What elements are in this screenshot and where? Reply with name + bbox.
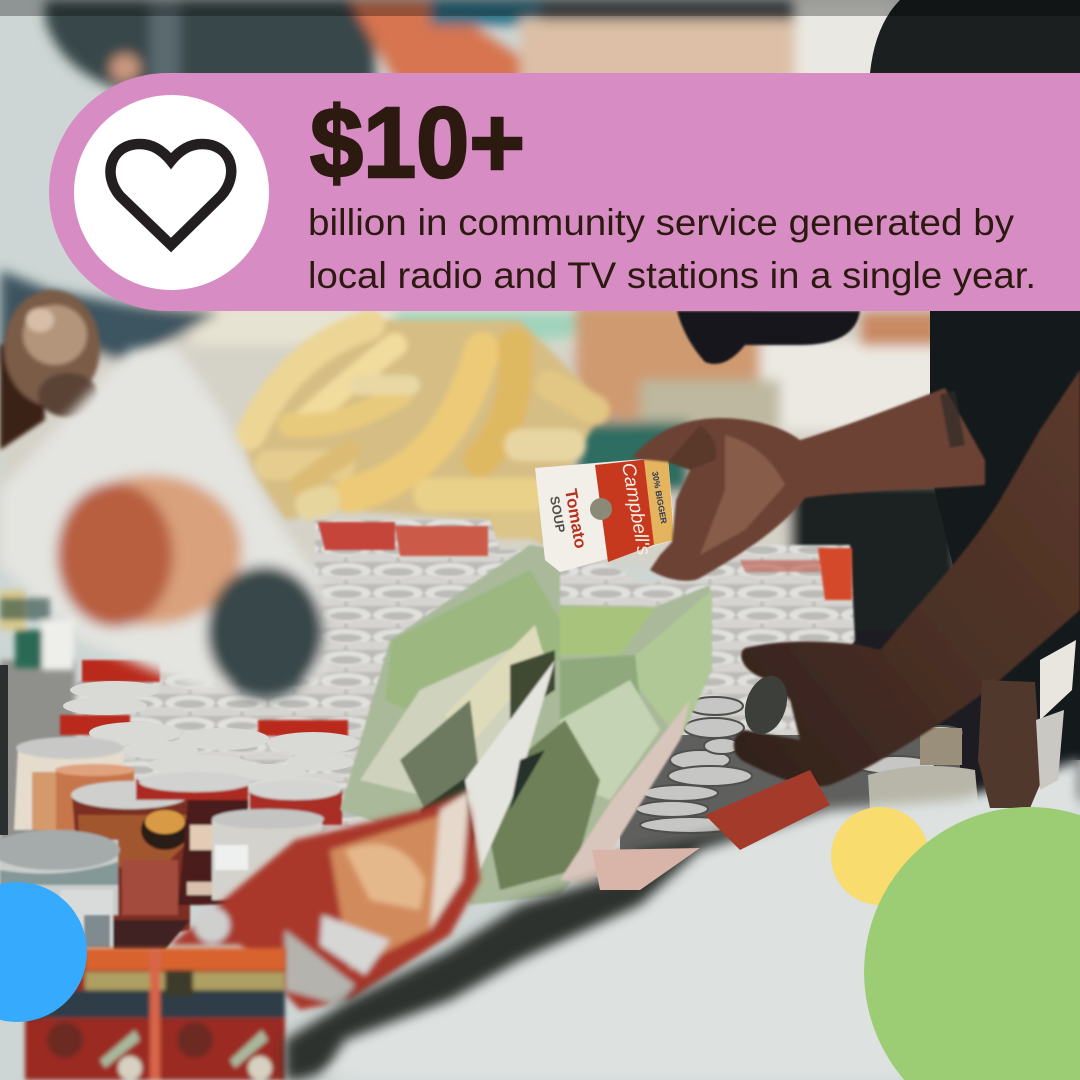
photo: orange snack bag	[170, 790, 480, 1010]
photo: lower forearm and hand	[734, 370, 1080, 786]
description text: local radio and TV stations in a single year.	[308, 255, 1036, 296]
photo: bunch of bananas	[240, 320, 605, 545]
photo: small orange can	[32, 772, 60, 830]
stat banner	[49, 73, 1080, 311]
description text	[308, 202, 1036, 296]
photo: green wrapped newspaper bag	[340, 545, 712, 905]
photo: front-left canned goods	[0, 737, 342, 950]
photo: dark shadow under snack bag	[285, 820, 800, 1080]
description text: billion in community service generated by	[308, 202, 1015, 243]
photo: dark maroon can	[178, 800, 248, 905]
photo: red can bands	[60, 522, 852, 736]
decorative circle: blue	[0, 882, 87, 1022]
photo: upper arm and hand holding the can	[632, 388, 985, 581]
decorative circle: yellow	[831, 807, 929, 905]
photo: red label can right	[250, 790, 342, 825]
photo: dark shirt right	[930, 311, 1080, 760]
photo: background objects behind bananas	[0, 270, 1080, 800]
photo: top strip shading	[0, 0, 1080, 16]
photo: can in lower hand	[738, 670, 794, 740]
photo: white nutrition can	[212, 820, 322, 900]
photo: rows of silver cans	[0, 520, 855, 880]
photo: black glove	[677, 311, 860, 364]
photo: dark red soup can	[72, 795, 190, 945]
photo: animal print fabric and tag	[978, 680, 1042, 808]
photo: Campbell's tomato soup can: SOUP	[547, 495, 568, 534]
photo: silver cans at lower right	[620, 697, 980, 850]
banner background pill	[49, 73, 1080, 311]
photo: Campbell's tomato soup can: Tomato	[561, 487, 590, 550]
photo: bright red carton corner	[705, 770, 830, 850]
statistic: $10+: $10+	[310, 87, 525, 199]
photo: Campbell's tomato soup can: 30% BIGGER	[650, 471, 669, 524]
photo: red and olive cartons	[25, 948, 285, 1080]
icon: heart in white circle	[74, 95, 269, 290]
photo: can lid tops left	[63, 681, 359, 797]
photo: dark shirt top right	[870, 0, 1080, 73]
photo: Campbell's tomato soup can	[535, 457, 675, 572]
photo: Campbell's tomato soup can: Campbell's	[617, 461, 654, 557]
photo: blurred white plastic bag foreground	[320, 760, 1080, 1080]
photo: white label can	[14, 745, 124, 830]
photo: label can lower right	[868, 766, 980, 835]
photo: blurred plastic bag held at left	[0, 345, 325, 698]
photo: blurred background above the banner	[45, 0, 895, 90]
photo: small green bottles at left edge	[0, 590, 74, 670]
photo: dark gap under cans	[113, 920, 190, 950]
photo: watch and wrist	[0, 290, 100, 450]
decorative circle: green	[864, 807, 1080, 1080]
photo: large silver can	[0, 840, 118, 915]
